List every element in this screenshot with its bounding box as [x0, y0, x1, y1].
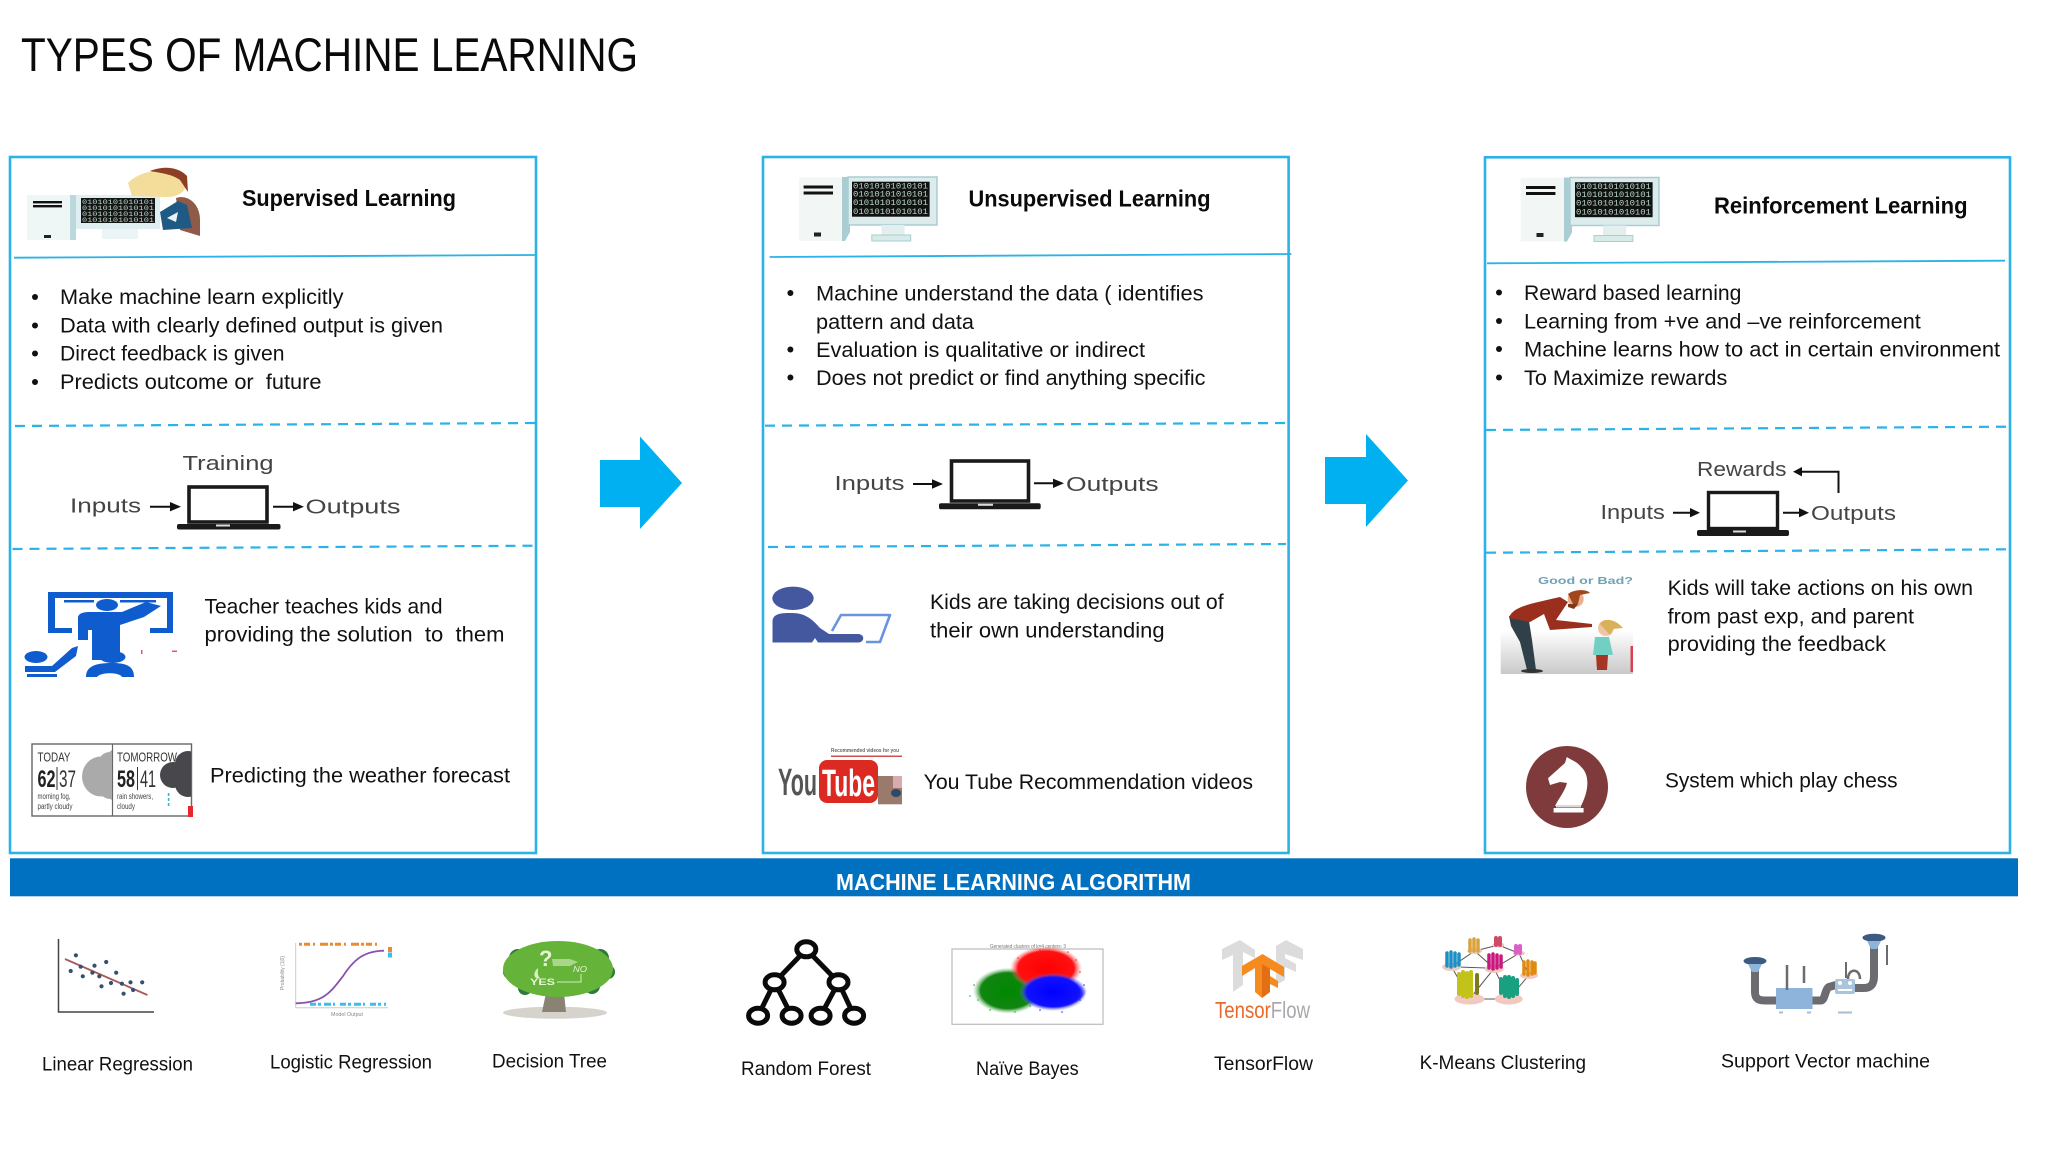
- icon: chess knight: [1526, 746, 1608, 828]
- icon: logistic curve: Model Output: [331, 1012, 363, 1018]
- bullet list: Data with clearly defined output is given: [60, 315, 443, 338]
- arrow: unsupervised to reinforcement: [1325, 434, 1408, 527]
- icon: logistic curve: [280, 943, 392, 1018]
- icon: computer: [1521, 178, 1659, 242]
- label: K-Means Clustering: [1420, 1053, 1586, 1074]
- icon: weather forecast: 37: [59, 766, 76, 793]
- diagram: training inputs to outputs: Inputs: [70, 495, 141, 517]
- algorithm: tensorflow: [1214, 940, 1313, 1075]
- bullet list: Evaluation is qualitative or indirect: [816, 339, 1145, 362]
- panel: supervised learning: [10, 157, 537, 853]
- heading: Reinforcement Learning: [1714, 192, 1968, 218]
- diagram: rewards inputs to outputs: Rewards: [1697, 459, 1786, 481]
- bullet list: To Maximize rewards: [1524, 367, 1727, 390]
- bullet list: [32, 286, 443, 394]
- panel border: [10, 157, 536, 853]
- bullet list: Machine understand the data ( identifies: [816, 283, 1204, 306]
- label: Decision Tree: [492, 1052, 607, 1073]
- diagram: training inputs to outputs: Outputs: [306, 496, 400, 518]
- icon: weather forecast: cloudy: [117, 802, 135, 811]
- icon: weather forecast: 41: [140, 766, 156, 793]
- bullet list: pattern and data: [816, 311, 974, 334]
- icon: pipes machine: [1744, 934, 1887, 1014]
- arrow: supervised to unsupervised: [600, 436, 682, 529]
- icon: cluster scatter plot: Generated clusters of k=4 centers: 3: [990, 944, 1066, 950]
- icon: computer: 01010101010101: [853, 182, 928, 191]
- bullet list: [787, 283, 1206, 390]
- icon: tree: ?: [539, 946, 552, 971]
- icon: person at laptop: [772, 587, 890, 642]
- icon: computer: 01010101010101: [1576, 200, 1651, 208]
- algorithm: k-means clustering: [1420, 938, 1586, 1074]
- icon: computer with person: [27, 168, 200, 240]
- icon: YouTube recommendations: Tube: [822, 763, 875, 805]
- icon: tensorflow logo: TensorFlow: [1215, 997, 1310, 1023]
- algorithm: support vector machine: [1721, 934, 1930, 1072]
- panel: unsupervised learning: [763, 157, 1291, 853]
- icon: computer with person: 01010101010101: [82, 211, 155, 218]
- icon: weather forecast: TODAY: [38, 750, 71, 765]
- kids description: Kids are taking decisions out of: [930, 591, 1224, 614]
- icon: weather forecast: 62: [38, 766, 56, 793]
- icon: weather forecast: TOMORROW: [117, 750, 178, 765]
- bullet list: [1496, 282, 2000, 390]
- label: Linear Regression: [42, 1055, 193, 1076]
- icon: tree: [503, 941, 615, 1019]
- icon: YouTube recommendations: Recommended videos for you: [831, 748, 899, 754]
- icon: weather forecast: morning fog,: [38, 792, 70, 801]
- banner: machine learning algorithm: [10, 858, 2018, 896]
- bullet list: Reward based learning: [1524, 282, 1741, 305]
- heading: Unsupervised Learning: [968, 186, 1210, 212]
- bullet list: Does not predict or find anything specific: [816, 367, 1206, 390]
- icon: parent giving feedback to child: [1501, 576, 1633, 674]
- feedback description: providing the feedback: [1668, 633, 1887, 656]
- icon: computer with person: 01010101010101: [82, 199, 155, 206]
- algorithm: linear regression: [42, 939, 193, 1076]
- bullet list: Direct feedback is given: [60, 343, 284, 366]
- icon: parent giving feedback to child: Good or Bad?: [1538, 576, 1633, 587]
- kids description line 2: their own understanding: [930, 619, 1165, 642]
- icon: weather forecast: [32, 744, 201, 817]
- label: Random Forest: [741, 1059, 872, 1080]
- icon: logistic curve: Probability (1|0): [280, 956, 286, 990]
- icon: computer with person: 01010101010101: [82, 217, 155, 224]
- icon: computer: 01010101010101: [853, 208, 928, 217]
- icon: teacher and students: [24, 592, 177, 677]
- chess description: System which play chess: [1665, 770, 1898, 793]
- bullet list: Learning from +ve and –ve reinforcement: [1524, 310, 1921, 333]
- feedback description: from past exp, and parent: [1668, 605, 1914, 628]
- bullet list: Machine learns how to act in certain environment: [1524, 339, 2000, 362]
- icon: tree: YES: [530, 977, 555, 987]
- icon: tree graph: [749, 942, 864, 1023]
- algorithm: naive bayes: [952, 944, 1103, 1080]
- icon: YouTube recommendations: [778, 748, 902, 805]
- feedback description: Kids will take actions on his own: [1668, 577, 1973, 600]
- icon: computer: [799, 177, 937, 241]
- icon: weather forecast: rain showers,: [117, 792, 153, 801]
- diagram: rewards inputs to outputs: [1600, 459, 1896, 536]
- diagram: rewards inputs to outputs: Outputs: [1811, 503, 1896, 525]
- algorithm: logistic regression: [270, 943, 432, 1073]
- icon: computer: 01010101010101: [1576, 208, 1651, 218]
- feedback description: [1668, 577, 1973, 656]
- title: TYPES OF MACHINE LEARNING: [21, 28, 638, 81]
- label: Naïve Bayes: [976, 1059, 1079, 1080]
- icon: computer: 01010101010101: [853, 199, 928, 208]
- icon: computer: 01010101010101: [1576, 191, 1651, 200]
- diagram: inputs to outputs: Outputs: [1066, 474, 1159, 496]
- icon: weather forecast: 58: [117, 766, 135, 793]
- icon: computer: 01010101010101: [853, 191, 928, 200]
- icon: tree: NO: [573, 965, 587, 974]
- diagram: training inputs to outputs: [70, 453, 400, 530]
- youtube description: You Tube Recommendation videos: [924, 771, 1253, 794]
- algorithm: random forest: [741, 942, 872, 1080]
- icon: cluster scatter plot: [952, 944, 1103, 1024]
- label: TensorFlow: [1214, 1054, 1313, 1075]
- weather description: Predicting the weather forecast: [210, 764, 510, 787]
- panel border: [763, 157, 1289, 853]
- label: Logistic Regression: [270, 1052, 432, 1073]
- heading: Supervised Learning: [242, 185, 456, 211]
- banner: machine learning algorithm: MACHINE LEARNING ALGORITHM: [836, 869, 1191, 895]
- icon: computer with person: 01010101010101: [82, 205, 155, 212]
- teacher description: Teacher teaches kids and: [204, 595, 442, 618]
- algorithm: decision tree: [492, 941, 615, 1073]
- teacher description line 2: providing the solution to them: [204, 624, 504, 647]
- bullet list: Predicts outcome or future: [60, 371, 322, 394]
- bullet list: Make machine learn explicitly: [60, 286, 344, 309]
- panel: reinforcement learning: [1485, 157, 2010, 853]
- label: Support Vector machine: [1721, 1051, 1930, 1072]
- icon: YouTube recommendations: You: [778, 762, 817, 804]
- icon: computer: 01010101010101: [1576, 183, 1651, 192]
- diagram: training inputs to outputs: Training: [182, 453, 274, 475]
- panel border: [1485, 157, 2010, 853]
- diagram: inputs to outputs: [834, 461, 1159, 509]
- icon: people clusters network: [1442, 938, 1538, 1004]
- diagram: rewards inputs to outputs: Inputs: [1600, 502, 1665, 524]
- icon: weather forecast: partly cloudy: [38, 802, 72, 811]
- diagram: inputs to outputs: Inputs: [834, 473, 904, 495]
- icon: scatter with fit line: [58, 939, 154, 1012]
